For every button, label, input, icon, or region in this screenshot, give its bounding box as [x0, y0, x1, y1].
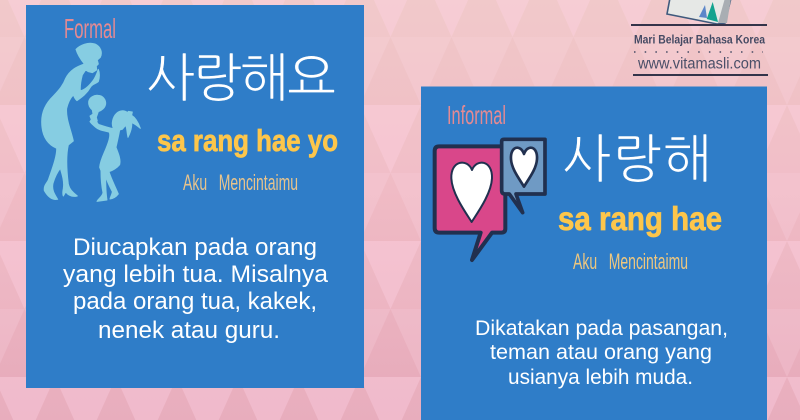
description: formal usage: pada orang tua, kakek, — [73, 288, 317, 315]
bottom rule — [633, 74, 768, 76]
description: informal usage: Dikatakan pada pasangan, — [475, 317, 728, 340]
panel: formal — [26, 5, 364, 388]
icon: mother and child silhouette — [42, 43, 140, 201]
description: formal usage: yang lebih tua. Misalnya — [63, 261, 329, 288]
label: Formal: Formal — [64, 13, 116, 44]
icon: open book — [667, 0, 731, 24]
heading: Korean saranghaeyo: 사랑해요 — [146, 52, 336, 104]
description: formal usage: Diucapkan pada orang — [73, 234, 317, 261]
panel: informal — [421, 86, 767, 420]
formal panel background — [26, 5, 364, 388]
description: informal usage — [475, 317, 728, 389]
translation: Aku Mencintaimu: Aku Mencintaimu — [183, 170, 298, 195]
label: Informal: Informal — [447, 100, 506, 130]
small blue speech bubble — [502, 139, 545, 213]
small white heart — [511, 148, 537, 187]
description: formal usage: nenek atau guru. — [98, 317, 280, 344]
description: formal usage — [63, 234, 329, 344]
logo title: Mari Belajar Bahasa Korea — [634, 34, 766, 46]
large white heart — [451, 163, 492, 222]
website url: www.vitamasli.com — [637, 56, 761, 72]
top rule — [631, 24, 767, 26]
romanization: sa rang hae yo: sa rang hae yo — [157, 123, 338, 158]
description: informal usage: teman atau orang yang — [490, 341, 712, 364]
heading: Korean saranghae: 사랑해 — [562, 133, 712, 185]
description: informal usage: usianya lebih muda. — [508, 366, 693, 389]
romanization: sa rang hae: sa rang hae — [558, 200, 722, 237]
translation: Aku Mencintaimu: Aku Mencintaimu — [573, 249, 688, 274]
icon: heart speech bubbles — [435, 139, 545, 260]
informal panel background — [421, 86, 767, 420]
logo: Mari Belajar Bahasa Korea — [631, 0, 768, 76]
dotted divider — [634, 51, 763, 53]
large pink speech bubble — [435, 146, 505, 260]
